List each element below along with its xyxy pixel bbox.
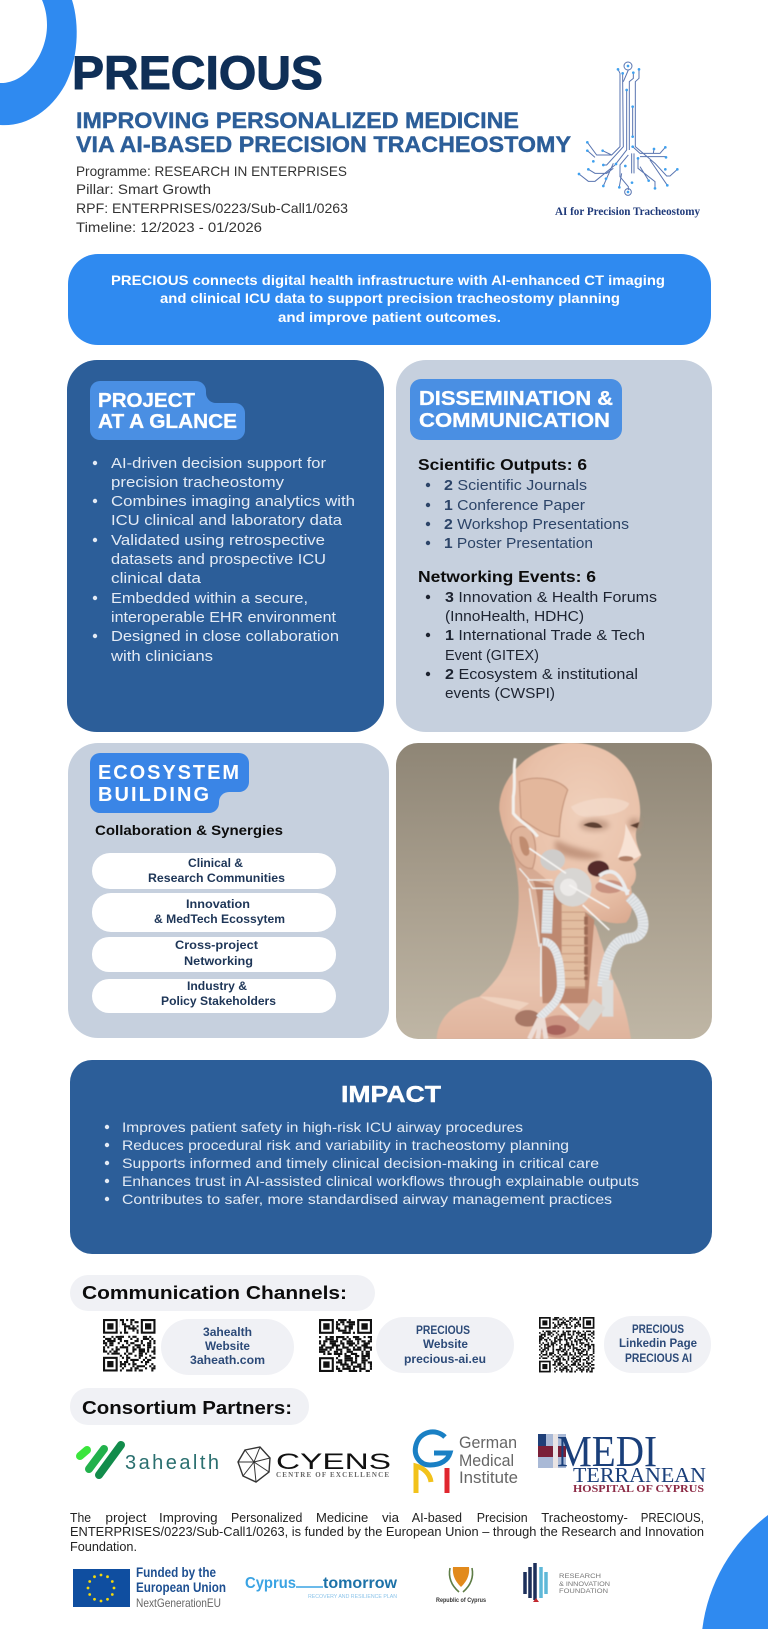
bullet list: project features: clinical data	[111, 570, 202, 587]
pill: clinical and research communities	[92, 853, 336, 889]
project metadata: RPF: ENTERPRISES/0223/Sub-Call1/0263	[76, 200, 348, 216]
funding statement: AI-based	[412, 1510, 462, 1525]
label pill: PRECIOUS website: Website	[423, 1337, 468, 1351]
funding statement: Improving	[159, 1510, 218, 1525]
bullet list: impact points: Improves patient safety in high-risk ICU airway procedures	[122, 1119, 523, 1135]
logo: AI for Precision Tracheostomy: AI for Precision Tracheostomy	[555, 206, 700, 218]
heading tag: ecosystem building: ECOSYSTEM	[98, 762, 239, 784]
label pill: PRECIOUS website	[376, 1317, 514, 1373]
logo: German Medical Institute: Medical	[459, 1452, 514, 1470]
subtitle	[76, 108, 571, 157]
QR code: PRECIOUS LinkedIn page	[539, 1317, 594, 1372]
panel: ecosystem building	[68, 743, 389, 1038]
logo: German Medical Institute: Institute	[459, 1469, 518, 1487]
logo: CYENS: CYENS	[276, 1449, 391, 1474]
logo: Republic of Cyprus emblem	[436, 1567, 486, 1604]
logo: Funded by the European Union: NextGenerationEU	[136, 1596, 221, 1610]
logo: Mediterranean Hospital of Cyprus: MEDI	[557, 1427, 657, 1476]
funding statement: Foundation.	[70, 1539, 137, 1554]
subtitle: VIA AI-BASED PRECISION TRACHEOSTOMY	[76, 132, 571, 157]
QR code: 3ahealth website	[103, 1319, 156, 1372]
logo: Republic of Cyprus emblem: Republic of Cyprus	[436, 1597, 486, 1604]
funding statement: Medicine	[316, 1510, 368, 1525]
label pill: PRECIOUS LinkedIn page: PRECIOUS	[632, 1322, 684, 1336]
networking events list: 3 Innovation & Health Forums	[445, 589, 657, 606]
networking events list: (InnoHealth, HDHC)	[445, 608, 584, 625]
logo: 3ahealth	[80, 1445, 219, 1475]
logo: CYENS	[238, 1447, 391, 1482]
bullet list: project features: Combines imaging analytics with	[111, 493, 355, 510]
bullet list: impact points: Reduces procedural risk and variability in tracheostomy planning	[122, 1137, 569, 1153]
funding statement: project	[105, 1510, 147, 1525]
project metadata: Programme: RESEARCH IN ENTERPRISES	[76, 163, 347, 179]
bullet list: project features: Embedded within a secure,	[111, 590, 308, 607]
pill: innovation and medtech ecosystem	[92, 893, 336, 932]
heading pill: consortium partners	[70, 1388, 309, 1425]
sub-heading: collaboration and synergies: Collaboration & Synergies	[95, 822, 283, 838]
logo: Mediterranean Hospital of Cyprus	[538, 1427, 706, 1495]
logo: Cyprus tomorrow	[245, 1575, 398, 1600]
logo: Cyprus tomorrow: Cyprus	[245, 1575, 296, 1592]
bullet list: impact points: Contributes to safer, more standardised airway management practices	[122, 1191, 612, 1207]
logo: Funded by the European Union: European Union	[136, 1580, 226, 1595]
scientific outputs list	[418, 457, 629, 552]
funding statement: Tracheostomy-	[541, 1510, 628, 1525]
pill: innovation and medtech ecosystem: Innovation	[186, 897, 250, 911]
heading pill: communication channels: Communication Channels:	[82, 1282, 347, 1303]
logo: Cyprus tomorrow: tomorrow	[323, 1575, 398, 1592]
networking events list	[418, 569, 657, 702]
subtitle: IMPROVING PERSONALIZED MEDICINE	[76, 108, 519, 133]
logo: CYENS: CENTRE OF EXCELLENCE	[276, 1471, 389, 1479]
heading pill: communication channels	[70, 1275, 375, 1311]
logo: Funded by the European Union: Funded by the	[136, 1565, 216, 1580]
heading tag: project at a glance: PROJECT	[98, 390, 195, 412]
heading tag: dissemination and communication	[410, 379, 622, 440]
heading tag: dissemination and communication: DISSEMINATION &	[419, 388, 613, 410]
heading tag: project at a glance	[90, 381, 245, 440]
bullet list: project features: Designed in close collaboration	[111, 628, 339, 645]
logo: Research and Innovation Foundation: & INNOVATION	[559, 1581, 610, 1588]
label pill: PRECIOUS LinkedIn page	[604, 1316, 711, 1373]
networking events list: Event (GITEX)	[445, 647, 539, 664]
illustration: anatomical head with tracheostomy tubing	[396, 740, 716, 1040]
bullet list: project features	[93, 455, 355, 665]
label pill: PRECIOUS website: precious-ai.eu	[404, 1352, 486, 1366]
label pill: PRECIOUS website: PRECIOUS	[416, 1323, 470, 1337]
panel: dissemination and communication	[396, 360, 712, 732]
networking events list: 2 Ecosystem & institutional	[445, 666, 638, 683]
heading: impact: IMPACT	[341, 1081, 441, 1107]
bullet list: impact points	[105, 1119, 639, 1207]
pill: industry and policy stakeholders: Policy Stakeholders	[161, 994, 276, 1008]
funding statement: via	[382, 1510, 400, 1525]
heading tag: project at a glance: AT A GLANCE	[98, 411, 237, 433]
heading pill: consortium partners: Consortium Partners:	[82, 1397, 292, 1418]
logo: AI for Precision Tracheostomy	[555, 62, 700, 218]
decorative arc top left	[0, 0, 77, 125]
logo: Mediterranean Hospital of Cyprus: HOSPITAL OF CYPRUS	[573, 1483, 704, 1495]
intro banner: PRECIOUS connects digital health infrastructure with AI-enhanced CT imaging	[111, 272, 665, 288]
heading tag: ecosystem building	[90, 753, 249, 813]
scientific outputs list: 2 Scientific Journals	[444, 477, 587, 494]
logo: Research and Innovation Foundation: RESEARCH	[559, 1573, 601, 1580]
networking events list: Networking Events: 6	[418, 569, 596, 586]
pill: innovation and medtech ecosystem: & MedTech Ecossytem	[154, 912, 285, 926]
scientific outputs list: 1 Poster Presentation	[444, 535, 593, 552]
logo: Mediterranean Hospital of Cyprus: TERRANEAN	[573, 1463, 706, 1487]
panel: project at a glance	[67, 360, 384, 732]
bullet list: project features: with clinicians	[110, 648, 213, 665]
logo: 3ahealth: 3ahealth	[125, 1452, 219, 1474]
bullet list: project features: precision tracheostomy	[111, 474, 285, 491]
bullet list: impact points: Enhances trust in AI-assisted clinical workflows through explainable outputs	[122, 1173, 639, 1189]
logo: German Medical Institute: German	[459, 1434, 517, 1452]
project metadata	[76, 163, 348, 235]
funding statement: The	[70, 1510, 91, 1525]
logo: Cyprus tomorrow: RECOVERY AND RESILIENCE PLAN	[308, 1594, 397, 1600]
title: PRECIOUS	[72, 46, 323, 99]
bullet list: project features: interoperable EHR environment	[111, 609, 337, 626]
bullet list: project features: AI-driven decision support for	[111, 455, 326, 472]
panel: impact	[70, 1060, 712, 1254]
intro banner: and improve patient outcomes.	[278, 309, 501, 325]
bullet list: project features: ICU clinical and laboratory data	[111, 512, 343, 529]
scientific outputs list: 1 Conference Paper	[444, 497, 585, 514]
funding statement: Personalized	[231, 1510, 302, 1525]
pill: clinical and research communities: Clinical &	[188, 856, 243, 870]
heading tag: dissemination and communication: COMMUNICATION	[419, 410, 610, 432]
scientific outputs list: Scientific Outputs: 6	[418, 457, 587, 474]
label pill: 3ahealth website: 3aheath.com	[190, 1353, 265, 1367]
networking events list: events (CWSPI)	[445, 685, 555, 702]
logo: German Medical Institute	[415, 1432, 518, 1493]
logo: Research and Innovation Foundation: FOUNDATION	[559, 1588, 608, 1595]
bullet list: project features: datasets and prospective ICU	[111, 551, 326, 568]
QR code: PRECIOUS website	[319, 1319, 372, 1372]
funding statement: PRECIOUS,	[641, 1510, 704, 1525]
networking events list: 1 International Trade & Tech	[445, 627, 645, 644]
label pill: 3ahealth website: Website	[205, 1339, 250, 1353]
intro banner	[68, 254, 711, 345]
logo: Funded by the European Union	[73, 1565, 226, 1610]
scientific outputs list: 2 Workshop Presentations	[444, 516, 629, 533]
bullet list: project features: Validated using retrospective	[111, 532, 325, 549]
label pill: 3ahealth website	[161, 1319, 294, 1375]
label pill: PRECIOUS LinkedIn page: Linkedin Page	[619, 1336, 697, 1350]
pill: clinical and research communities: Research Communities	[148, 871, 285, 885]
funding statement: ENTERPRISES/0223/Sub-Call1/0263, is funded by the European Union – through the Research and Innovation	[70, 1524, 704, 1539]
bullet list: impact points: Supports informed and timely clinical decision-making in critical care	[122, 1155, 599, 1171]
heading tag: ecosystem building: BUILDING	[98, 784, 209, 806]
intro banner: and clinical ICU data to support precision tracheostomy planning	[160, 290, 620, 306]
project metadata: Pillar: Smart Growth	[76, 181, 211, 197]
project metadata: Timeline: 12/2023 - 01/2026	[76, 219, 262, 235]
logo: Research and Innovation Foundation	[525, 1563, 610, 1602]
pill: industry and policy stakeholders	[92, 979, 336, 1013]
bottom right circle	[702, 1515, 768, 1629]
pill: cross-project networking: Cross-project	[175, 938, 258, 952]
label pill: 3ahealth website: 3ahealth	[203, 1325, 252, 1339]
funding statement: Precision	[477, 1510, 528, 1525]
pill: cross-project networking: Networking	[184, 954, 253, 968]
label pill: PRECIOUS LinkedIn page: PRECIOUS AI	[625, 1351, 692, 1365]
pill: cross-project networking	[92, 937, 336, 972]
funding statement	[70, 1510, 704, 1554]
pill: industry and policy stakeholders: Industry &	[187, 979, 247, 993]
